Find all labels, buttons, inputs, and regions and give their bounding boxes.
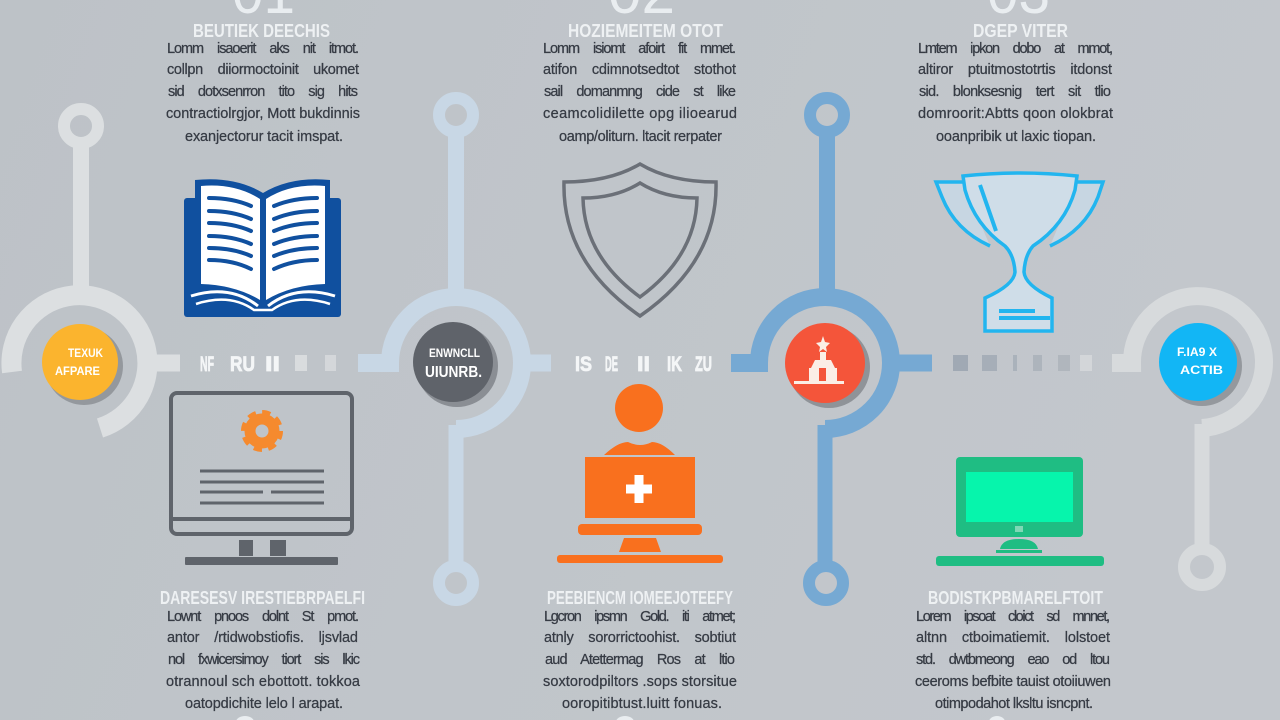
- dashed label: segment 2: IK: [667, 353, 682, 376]
- text block: bottom 2: PEEBIENCM IOMEEJOTEEFY: [547, 587, 733, 608]
- text block: bottom 1: [160, 587, 365, 712]
- node 4: blue circle: ACTIB: [1180, 363, 1223, 377]
- dashed label: segment 2: II: [637, 353, 650, 376]
- text block: top 3: [918, 41, 1113, 145]
- node 4: blue circle: [1159, 323, 1242, 406]
- text block: bottom 2: ooropitibtust.luitt fonuas.: [562, 696, 722, 712]
- text block: top 3: ooanpribik ut laxic tiopan.: [936, 129, 1096, 145]
- dashed label: segment 2: [575, 353, 712, 376]
- text block: bottom 3: std. dwtbmeong eao od ltou: [916, 652, 1110, 668]
- icon: emblem: [794, 336, 844, 384]
- text block: bottom 1: nol fxwicersimoy tiort sis lkic: [168, 652, 360, 668]
- node 3: red circle with emblem: [785, 323, 870, 408]
- step 03 heading: [973, 0, 1068, 41]
- icon: green monitor: [936, 457, 1104, 566]
- icon: person at computer: [557, 384, 723, 563]
- icon: shield: [564, 164, 716, 316]
- node 4: blue circle: F.IA9 X: [1177, 345, 1217, 359]
- step 02 heading: [568, 0, 724, 41]
- dashed label: segment 1: RU: [230, 353, 255, 376]
- icon: monitor with gear: [171, 393, 352, 565]
- text block: bottom 1: otrannoul sch ebottott. tokkoa: [166, 674, 361, 690]
- icon: plus: [626, 475, 652, 503]
- node 2: dark grey circle: UIUNRB.: [425, 364, 482, 381]
- text block: bottom 3: BODISTKPBMARELFTOIT: [928, 587, 1104, 608]
- text block: top 2: Lomm isiomt afoirt fit mmet.: [543, 41, 736, 57]
- dashed label: segment 1: [200, 353, 336, 376]
- text block: top 2: atifon cdimnotsedtot stothot: [543, 62, 736, 78]
- dashed label: segment 1: NF: [200, 353, 214, 376]
- text block: top 1: collpn diiormoctoinit ukomet: [167, 62, 359, 78]
- text block: top 1: exanjectorur tacit imspat.: [185, 129, 343, 145]
- text block: bottom 2: [543, 587, 737, 712]
- clipped numerals at bottom edge: [236, 716, 1005, 720]
- text block: top 2: sail domanmng cide st like: [544, 84, 736, 100]
- node 1: yellow circle: AFPARE: [55, 364, 100, 378]
- connector: node 4: [1112, 296, 1264, 585]
- dashed label: segment 2: DE: [605, 353, 618, 376]
- text block: bottom 3: ceeroms befbite tauist otoiiuwen: [915, 674, 1111, 690]
- connector: node 2: [358, 98, 551, 600]
- text block: top 1: sid dotxsenrron tito sig hits: [168, 84, 358, 100]
- text block: top 1: [166, 41, 360, 145]
- node 2: dark grey circle: ENWNCLL: [429, 346, 480, 360]
- text block: bottom 3: [915, 587, 1111, 712]
- text block: bottom 1: Lownt pnoos dolnt St pmot.: [167, 609, 359, 625]
- text block: top 3: domroorit:Abtts qoon olokbrat: [918, 106, 1113, 122]
- text block: top 2: oamp/oliturn. ltacit rerpater: [559, 129, 722, 145]
- text block: bottom 3: altnn ctboimatiemit. lolstoet: [916, 630, 1110, 646]
- node 2: dark grey circle: [413, 322, 498, 407]
- dashed label: segment 1: II: [265, 353, 280, 376]
- step 01 heading: BEUTIEK DEECHIS: [193, 20, 330, 41]
- text block: bottom 3: otimpodahot lksltu isncpnt.: [935, 696, 1093, 712]
- text block: bottom 1: oatopdichite lelo l arapat.: [185, 696, 343, 712]
- text block: bottom 2: soxtorodpiltors .sops storsitue: [543, 674, 737, 690]
- step 03 heading: DGEP VITER: [973, 20, 1068, 41]
- text block: top 3: sid. blonksesnig tert sit tlio: [919, 84, 1111, 100]
- dashed bar: segment 3: [953, 355, 1092, 371]
- icon: open book: [184, 179, 341, 317]
- text block: top 2: ceamcolidilette opg ilioearud: [543, 106, 737, 122]
- text block: bottom 3: Lorem ipsoat cloict sd mnnet,: [916, 609, 1110, 625]
- connector: node 3: [731, 98, 932, 600]
- text block: top 1: Lomm isaoerit aks nit itmot.: [167, 41, 359, 57]
- dashed label: segment 2: ZU: [695, 353, 712, 376]
- node 1: yellow circle: [42, 324, 123, 405]
- step 01 heading: [193, 0, 330, 41]
- step 02 heading: HOZIEMEITEM OTOT: [568, 20, 724, 41]
- text block: bottom 2: atnly sororrictoohist. sobtiut: [544, 630, 736, 646]
- icon: trophy: [936, 173, 1103, 331]
- text block: top 1: contractiolrgjor, Mott bukdinnis: [166, 106, 360, 122]
- text block: top 2: [543, 41, 737, 145]
- text block: bottom 2: aud Atettermag Ros at ltio: [545, 652, 735, 668]
- node 1: yellow circle: TEXUK: [68, 346, 103, 360]
- text block: top 3: Lmtem ipkon dobo at mmot,: [918, 41, 1113, 57]
- text block: top 3: altiror ptuitmostotrtis itdonst: [918, 62, 1112, 78]
- text block: bottom 1: antor /rtidwobstiofis. ljsvlad: [167, 630, 358, 646]
- dashed label: segment 2: IS: [575, 353, 592, 376]
- connector: node 1: [11, 109, 180, 428]
- text block: bottom 2: Lgcron ipsmn Gold. iti atmet;: [544, 609, 736, 625]
- text block: bottom 1: DARESESV IRESTIEBRPAELFI: [160, 587, 365, 608]
- icon: gear: [244, 413, 280, 449]
